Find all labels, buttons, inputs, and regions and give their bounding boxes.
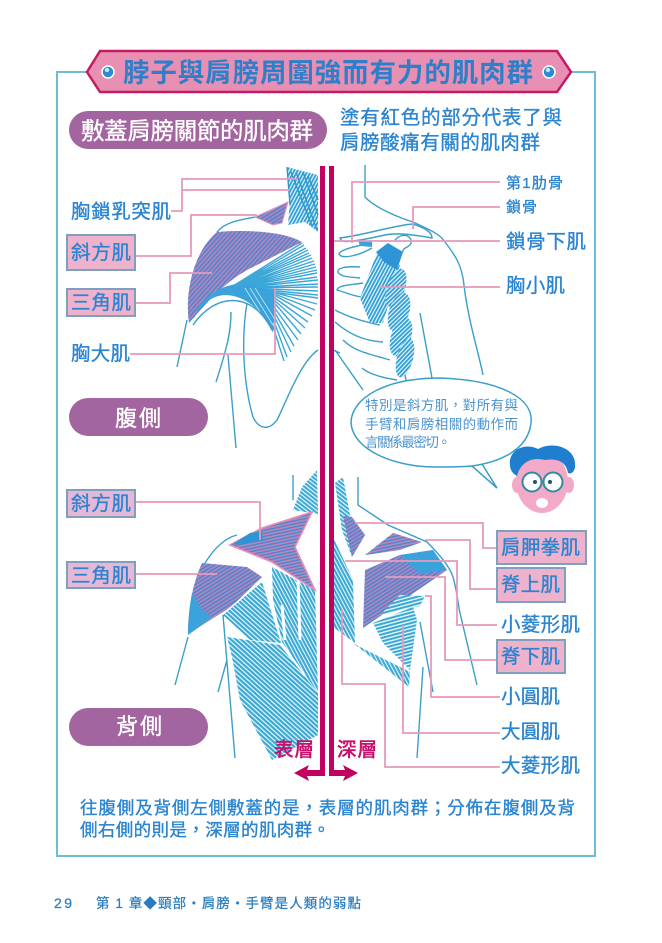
levator — [335, 477, 365, 557]
front left labels: 胸大肌 — [71, 343, 130, 365]
trapezius back — [230, 512, 315, 590]
front view: deep muscles — [335, 165, 483, 390]
front right labels: 鎖骨下肌 — [506, 231, 586, 253]
front left labels — [67, 201, 171, 365]
back right labels — [497, 531, 586, 777]
bottom explanation: 側右側的則是，深層的肌肉群。 — [80, 820, 330, 840]
ribs — [335, 243, 432, 390]
speech bubble: 手臂和肩膀相關的動作而 — [365, 416, 518, 432]
deltoid — [188, 231, 302, 323]
pill: back side — [69, 708, 208, 746]
back view: deep muscles — [333, 477, 477, 758]
pill: front side: 腹側 — [115, 406, 161, 431]
bottom explanation: 往腹側及背側左側敷蓋的是，表層的肌肉群；分佈在腹側及背 — [80, 798, 575, 818]
heading pill: 敷蓋肩膀關節的肌肉群 — [81, 118, 313, 144]
latissimus — [227, 637, 318, 760]
front right labels: 第1肋骨 — [506, 174, 563, 192]
rhomboids — [333, 537, 355, 643]
speech bubble: 言關係最密切。 — [365, 434, 451, 450]
icon: right bead — [543, 66, 555, 78]
teres minor — [380, 595, 425, 615]
back right labels: 脊上肌 — [501, 574, 560, 596]
back right labels: 大菱形肌 — [501, 755, 580, 777]
back view: surface muscles — [175, 470, 318, 760]
arrow: right — [329, 765, 358, 781]
front view: surface muscles — [177, 167, 340, 448]
mid back — [272, 567, 318, 693]
note text: 塗有紅色的部分代表了與 — [340, 107, 562, 129]
upper trapezius — [255, 202, 288, 225]
central divider with arrows — [294, 166, 358, 781]
label: surface layer: 表層 — [274, 739, 314, 761]
page number: 29 — [54, 895, 72, 911]
footer chapter text: 第 1 章◆頸部・肩膀・手臂是人類的弱點 — [96, 895, 361, 911]
deltoid back — [188, 563, 262, 635]
infraspinatus — [363, 550, 447, 628]
back left labels: 斜方肌 — [71, 493, 131, 515]
clavicle — [340, 224, 432, 241]
front left labels: 斜方肌 — [71, 242, 131, 264]
front right labels: 胸小肌 — [506, 275, 565, 297]
heading pill — [69, 111, 327, 149]
pill: back side: 背側 — [116, 714, 162, 739]
title banner — [87, 51, 571, 92]
subclavius strip — [358, 240, 372, 247]
icon: character face — [510, 445, 575, 513]
front left labels: 胸鎖乳突肌 — [71, 201, 171, 223]
back right labels: 肩胛拳肌 — [501, 537, 580, 559]
pectoralis bundle — [193, 283, 275, 333]
upper trapezius back — [293, 470, 318, 514]
back left labels: 三角肌 — [71, 565, 131, 587]
arm outlines — [177, 300, 340, 448]
title text: 脖子與肩膀周圍強而有力的肌肉群 — [123, 58, 533, 88]
back right labels: 脊下肌 — [501, 646, 560, 668]
pectoralis minor — [360, 253, 400, 323]
back right labels: 小圓肌 — [501, 686, 560, 708]
back left labels — [67, 490, 135, 588]
front left labels: 三角肌 — [71, 292, 131, 314]
note text — [340, 107, 562, 154]
serratus lobes — [381, 266, 418, 379]
teres major — [373, 607, 417, 670]
arrow: left — [294, 765, 325, 781]
teres group — [223, 582, 281, 643]
leader lines — [130, 179, 500, 767]
back right labels: 小菱形肌 — [501, 614, 580, 636]
pectoralis fan — [225, 243, 318, 361]
neck muscle — [287, 167, 318, 232]
speech bubble — [351, 378, 531, 488]
front right labels: 鎖骨 — [506, 199, 537, 216]
page frame — [57, 72, 595, 856]
pill: front side — [69, 398, 208, 436]
front right labels — [506, 174, 586, 297]
back right labels: 大圓肌 — [501, 721, 560, 743]
bottom explanation — [80, 798, 575, 840]
speech bubble: 特別是斜方肌，對所有與 — [365, 398, 518, 413]
icon: left bead — [102, 66, 114, 78]
supraspinatus — [365, 533, 422, 555]
neck and shoulder outline — [365, 165, 483, 375]
note text: 肩膀酸痛有關的肌肉群 — [340, 132, 540, 154]
label: deep layer: 深層 — [337, 739, 377, 761]
